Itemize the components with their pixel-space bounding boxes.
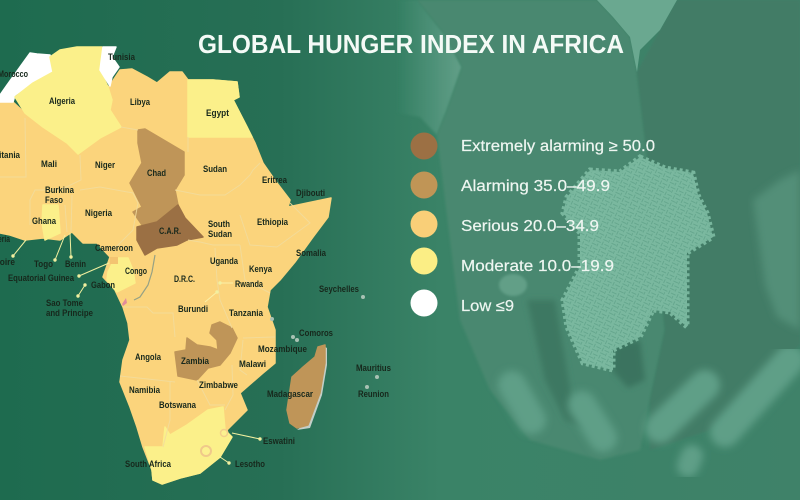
label: Zambia: Zambia <box>181 356 210 366</box>
label: Equatorial Guinea: Equatorial Guinea <box>8 273 75 283</box>
legend item: low: Low ≤9 <box>461 298 514 315</box>
legend item: alarming <box>410 172 610 198</box>
leader: Eswatini <box>232 433 262 441</box>
region: Equatorial Guinea <box>110 257 118 264</box>
leader: Benin <box>69 233 73 259</box>
country labels <box>0 52 391 469</box>
region: alarming Madagascar <box>287 345 325 428</box>
region: serious countries base <box>0 69 331 484</box>
label: Eswatini: Eswatini <box>263 436 295 446</box>
right thumb <box>753 170 800 330</box>
label: C.A.R.: C.A.R. <box>159 226 181 236</box>
region: moderate Algeria <box>15 47 121 154</box>
label: Sao Tome and Principe <box>46 298 93 318</box>
left fingers shadow <box>527 300 590 430</box>
label: South Sudan: South <box>208 219 230 229</box>
region: extremely alarming C.A.R. <box>137 205 203 255</box>
label: Seychelles: Seychelles <box>319 284 359 294</box>
leader: Equatorial Guinea <box>77 263 109 278</box>
label: Lesotho: Lesotho <box>235 459 265 469</box>
label: Tanzania: Tanzania <box>229 308 264 318</box>
label: Burkina Faso <box>45 185 75 205</box>
label: Comoros: Comoros <box>299 328 333 338</box>
label: Zimbabwe: Zimbabwe <box>199 380 238 390</box>
finger 4 <box>725 360 790 432</box>
label: Rwanda: Rwanda <box>235 279 264 289</box>
region: moderate Egypt <box>188 80 252 137</box>
finger 1 <box>512 385 532 420</box>
finger 3 <box>660 385 705 428</box>
leader lines and island dots <box>11 233 379 465</box>
region: alarming Zambia <box>175 322 237 380</box>
label: Namibia: Namibia <box>129 385 161 395</box>
legend item: serious: Serious 20.0–34.9 <box>461 218 599 235</box>
region: Madagascar shadow <box>297 345 327 430</box>
region: alarming Chad <box>130 129 184 225</box>
label: Eritrea: Eritrea <box>262 175 288 185</box>
map of Africa <box>0 47 331 484</box>
region: Gabon coast mark <box>122 298 127 306</box>
leader: Sao Tome <box>76 283 87 298</box>
legend item: extremely alarming: Extremely alarming ≥ 50.0 <box>461 138 655 155</box>
label: Mali: Mali <box>41 159 57 169</box>
label: Nigeria: Nigeria <box>85 208 113 218</box>
region: moderate Congo <box>107 258 135 292</box>
left hand <box>417 0 665 460</box>
leader: Lesotho <box>220 457 231 465</box>
region: moderate Ghana <box>42 205 60 240</box>
legend item: alarming: Alarming 35.0–49.9 <box>461 178 610 195</box>
region: Lesotho <box>201 446 211 456</box>
title: GLOBAL HUNGER INDEX IN AFRICA <box>198 29 624 59</box>
label: Sao Tome and Principe: and Principe <box>46 308 93 318</box>
grain pile <box>563 157 713 370</box>
label: Burundi: Burundi <box>178 304 208 314</box>
region: Eswatini <box>220 430 228 436</box>
region: low Tunisia <box>100 47 119 86</box>
islands <box>270 295 379 389</box>
leader: Rwanda <box>218 281 233 285</box>
photo: hands holding grain <box>398 0 800 466</box>
legend item: extremely alarming <box>410 132 655 160</box>
top gap between hands <box>597 0 677 72</box>
legend item: low <box>410 290 514 316</box>
label: Ghana: Ghana <box>32 216 57 226</box>
legend item: moderate <box>410 248 614 275</box>
label: Benin: Benin <box>65 259 86 269</box>
label: Kenya: Kenya <box>249 264 273 274</box>
finger 2 <box>582 405 603 438</box>
label: Madagascar: Madagascar <box>267 389 313 399</box>
region: moderate South Africa <box>145 407 232 484</box>
label: Malawi: Malawi <box>239 359 266 369</box>
palm shadow <box>612 340 645 388</box>
label: Burkina Faso: Faso <box>45 195 63 205</box>
label: Cameroon: Cameroon <box>95 243 133 253</box>
label: Egypt: Egypt <box>206 108 229 118</box>
label: Botswana: Botswana <box>159 400 197 410</box>
label: Niger: Niger <box>95 160 115 170</box>
label: Djibouti: Djibouti <box>296 188 325 198</box>
leader: Burundi <box>205 290 219 302</box>
label: South Africa: South Africa <box>125 459 172 469</box>
label: Mauritius: Mauritius <box>356 363 391 373</box>
label: Angola: Angola <box>135 352 162 362</box>
label: Congo: Congo <box>125 266 147 276</box>
legend item: serious <box>410 210 599 238</box>
label: Uganda: Uganda <box>210 256 239 266</box>
leader: Togo <box>53 235 65 262</box>
region: low Morocco <box>0 53 53 102</box>
label: Libya: Libya <box>130 97 151 107</box>
label: South Sudan <box>208 219 232 239</box>
legend item: moderate: Moderate 10.0–19.9 <box>461 258 614 275</box>
label: Somalia: Somalia <box>296 248 327 258</box>
label: Reunion: Reunion <box>358 389 389 399</box>
label: D.R.C.: D.R.C. <box>174 274 195 284</box>
label: Mozambique: Mozambique <box>258 344 307 354</box>
leader: Cote d'Ivoire <box>11 240 26 258</box>
thumb tip <box>499 274 527 296</box>
label: Gabon: Gabon <box>91 280 115 290</box>
borders <box>0 118 310 447</box>
label: Sao Tome and Principe: Sao Tome <box>46 298 83 308</box>
label: Burkina Faso: Burkina <box>45 185 75 195</box>
label: Tunisia: Tunisia <box>108 52 136 62</box>
label: Chad: Chad <box>147 168 166 178</box>
finger tips <box>512 360 790 466</box>
label: South Sudan: Sudan <box>208 229 232 239</box>
label: Ethiopia: Ethiopia <box>257 217 289 227</box>
finger 5 <box>688 456 692 466</box>
legend <box>410 132 655 316</box>
label: Togo: Togo <box>34 259 53 269</box>
left wrist <box>398 0 462 135</box>
river boundary <box>134 255 155 300</box>
right hand <box>637 0 800 450</box>
label: Sudan: Sudan <box>203 164 227 174</box>
label: Algeria: Algeria <box>49 96 76 106</box>
